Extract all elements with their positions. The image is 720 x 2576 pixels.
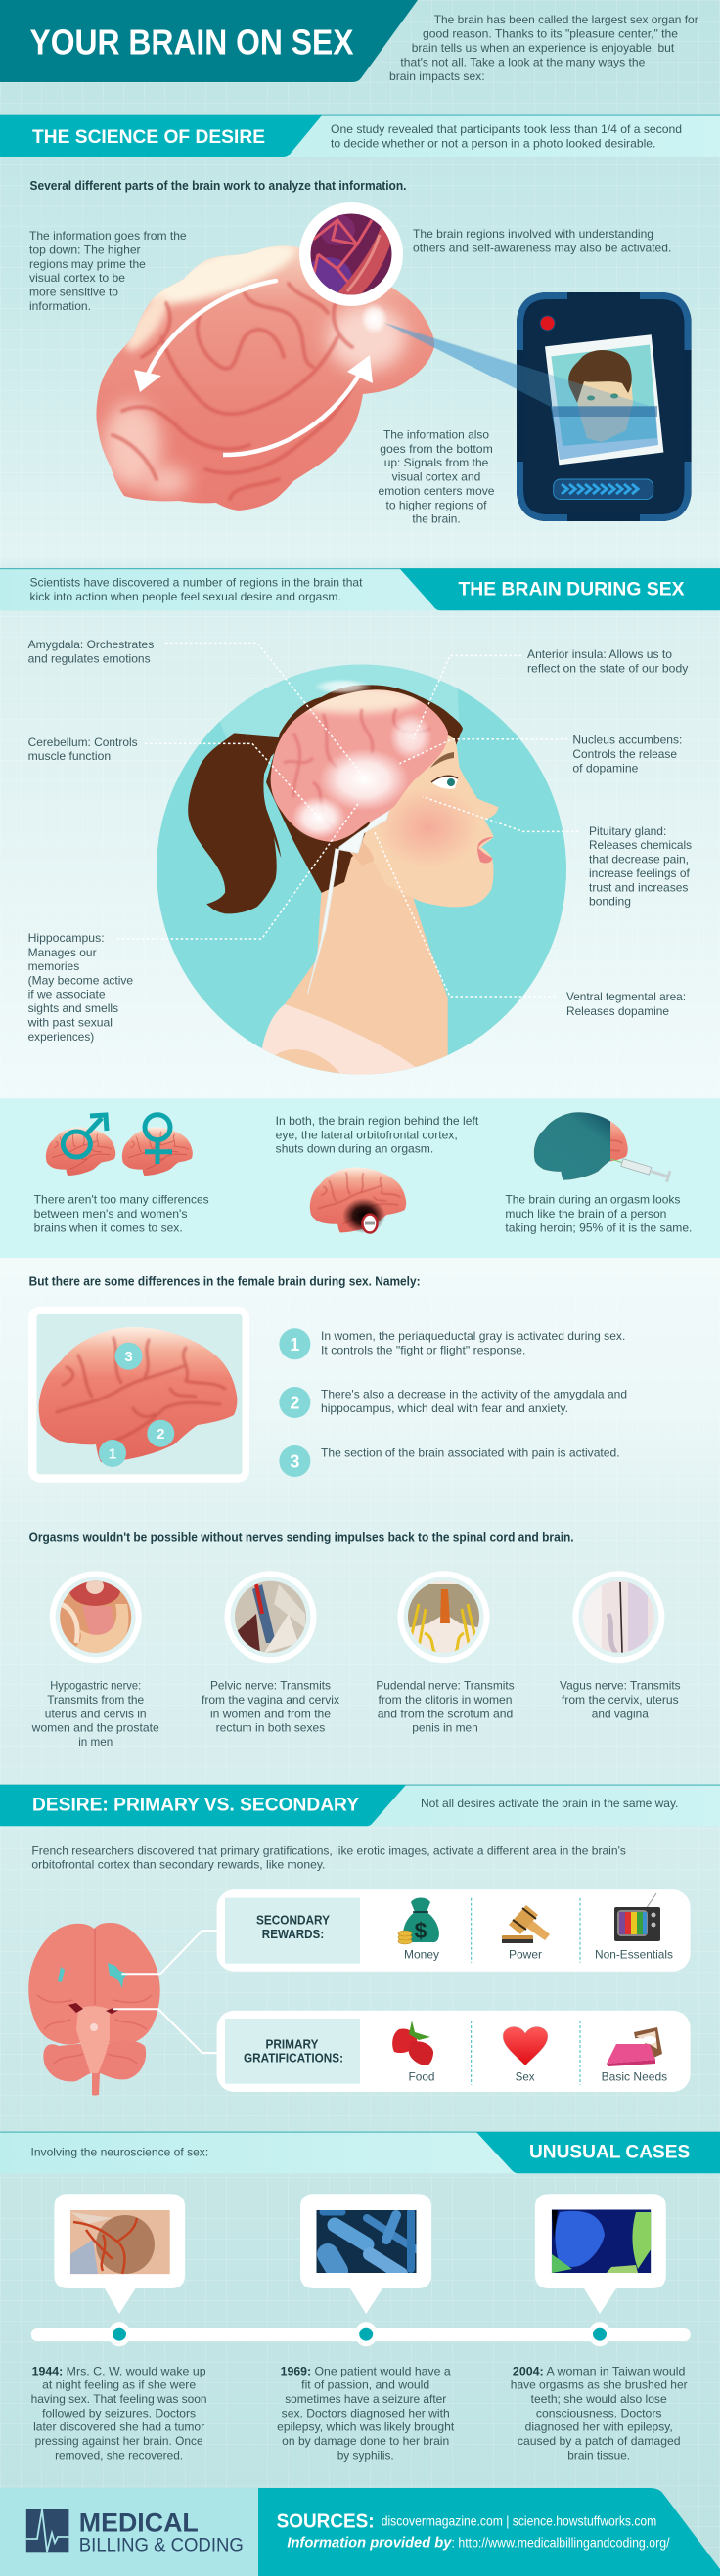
big brain illustration — [96, 231, 434, 511]
caption: vagus: Vagus nerve: Transmits — [560, 1679, 681, 1693]
label: hippocampus: sights and smells — [28, 1001, 118, 1015]
case bubble 1969 — [300, 2194, 431, 2314]
case text 2004: diagnosed her with epilepsy, — [525, 2421, 673, 2434]
label: hippocampus: memories — [28, 959, 79, 973]
text: self awareness: The brain regions involved with understanding — [413, 227, 653, 241]
panel: men vs women band — [0, 1098, 720, 1258]
intro text: brain impacts sex: — [389, 69, 485, 83]
panel: primary gratifications: PRIMARY — [266, 2036, 319, 2051]
phone scanner — [386, 292, 692, 521]
text: heroin comparison: taking heroin; 95% of it is the same. — [505, 1221, 692, 1234]
caption: hypogastric: uterus and cervis in — [45, 1707, 147, 1720]
nerve 3: pudendal — [397, 1571, 489, 1663]
marker 1 — [99, 1440, 126, 1467]
case text 1969: by syphilis. — [338, 2448, 394, 2462]
eye and brow — [430, 752, 458, 789]
footer: sources: Information provided by — [287, 2534, 452, 2551]
case text 1944: pressing against her brain. Once — [35, 2434, 203, 2448]
active regions: dark red — [68, 2003, 83, 2013]
marker 3 — [115, 1343, 143, 1370]
progress bar — [554, 479, 653, 499]
caption: pudendal: penis in men — [412, 1721, 478, 1735]
panel: primary gratifications — [217, 2011, 691, 2092]
section header: the brain during sex: THE BRAIN DURING SEX — [458, 580, 685, 600]
list item 1 — [279, 1328, 625, 1359]
label: nucleus accumbens: Nucleus accumbens: — [572, 733, 682, 747]
case text 2004: consciousness. Doctors — [536, 2406, 661, 2420]
list item 1: In women, the periaqueductal gray is activated during sex. — [321, 1329, 625, 1343]
panel: secondary rewards — [217, 1889, 691, 1972]
label: anterior insula — [527, 647, 688, 675]
case text 1944: removed, she recovered. — [55, 2448, 183, 2462]
caption: pudendal: from the clitoris in women — [378, 1693, 513, 1707]
case text 2004: brain tissue. — [567, 2448, 630, 2462]
icon: television — [614, 1893, 660, 1941]
case text 1969: sometimes have a seizure after — [285, 2392, 446, 2406]
text: top down: visual cortex to be — [29, 271, 125, 285]
label: pituitary gland — [589, 824, 692, 909]
icon: male and female brains — [46, 1115, 193, 1176]
label: pituitary gland: bonding — [589, 895, 631, 909]
text: french researchers — [31, 1843, 626, 1872]
icon: bed — [607, 2027, 662, 2066]
label: pituitary gland: increase feelings of — [589, 866, 690, 880]
caption: hypogastric: Hypogastric nerve: — [50, 1679, 141, 1693]
case text 1969: fit of passion, and would — [301, 2378, 429, 2392]
list item 2: There's also a decrease in the activity of the amygdala and — [321, 1388, 627, 1401]
arrow: top down — [147, 281, 276, 377]
label: pituitary gland: Releases chemicals — [589, 838, 692, 852]
icon: money bag: $ — [415, 1918, 428, 1943]
caption: pudendal: Pudendal nerve: Transmits — [376, 1679, 515, 1693]
caption: pelvic: Pelvic nerve: Transmits — [210, 1679, 331, 1693]
label: cerebellum — [28, 735, 138, 763]
text: heroin comparison: much like the brain of a person — [505, 1207, 666, 1221]
section header: the science of desire: THE SCIENCE OF DESIRE — [32, 127, 265, 148]
caption: vagus: and vagina — [592, 1707, 649, 1720]
text: top down: information. — [29, 299, 91, 313]
marker 1: 1 — [109, 1445, 116, 1462]
lips — [477, 837, 494, 863]
subheading: nerves: Orgasms wouldn't be possible without nerves sending impulses back to the spinal cord and brain. — [29, 1532, 574, 1545]
footer: logo: BILLING & CODING — [79, 2534, 244, 2555]
footer: sources — [258, 2488, 720, 2576]
text: few differences: brains when it comes to sex. — [34, 1221, 183, 1234]
intro text: The brain has been called the largest sex organ for — [434, 13, 698, 26]
text: orbitofrontal cortex: eye, the lateral orbitofrontal cortex, — [276, 1128, 458, 1141]
case text 1944: 1944: Mrs. C. W. would wake up — [32, 2364, 206, 2377]
text: self awareness: others and self-awareness may also be activated. — [413, 241, 671, 254]
logo mark — [26, 2509, 68, 2552]
text: french researchers: orbitofrontal cortex than secondary rewards, like money. — [31, 1858, 325, 1872]
text: top down: top down: The higher — [29, 243, 141, 256]
text: top down: regions may prime the — [29, 257, 146, 271]
magnified neurons inset — [299, 202, 403, 306]
label: pituitary gland: Pituitary gland: — [589, 824, 666, 838]
icon: heart — [503, 2026, 548, 2065]
case text 1969: 1969: One patient would have a — [281, 2364, 451, 2377]
label: anterior insula: Anterior insula: Allows us to — [527, 647, 672, 661]
case text 2004: teeth; she would also lose — [531, 2392, 667, 2406]
scan beam — [383, 323, 655, 421]
record light — [540, 316, 555, 331]
text: bottom up — [378, 427, 495, 526]
caption: pelvic: rectum in both sexes — [216, 1721, 325, 1735]
list item 2: hippocampus, which deal with fear and anxiety. — [321, 1401, 568, 1415]
text: heroin comparison: The brain during an orgasm looks — [505, 1193, 680, 1207]
text: bottom up: visual cortex and — [392, 470, 480, 484]
text: bottom up: up: Signals from the — [384, 456, 489, 469]
label: cerebellum: muscle function — [28, 749, 111, 763]
intro text: brain tells us when an experience is enjoyable, but — [412, 41, 675, 55]
label: amygdala: Amygdala: Orchestrates — [28, 638, 154, 651]
label: hippocampus: if we associate — [28, 988, 106, 1001]
label: amygdala: and regulates emotions — [28, 651, 151, 665]
dotted pointer lines — [117, 644, 578, 997]
label: hippocampus: Manages our — [28, 946, 97, 959]
brain activation glow — [319, 748, 409, 811]
footer: sources: discovermagazine.com | science.howstuffworks.com — [382, 2513, 656, 2529]
nerve 1: hypogastric — [50, 1571, 142, 1663]
marker 2 — [147, 1420, 174, 1447]
logo wordmark: MEDICAL — [79, 2508, 199, 2537]
case text 1944: later discovered she had a tumor — [33, 2421, 204, 2434]
section header: unusual cases — [0, 2132, 720, 2173]
panel: secondary rewards: SECONDARY — [256, 1913, 330, 1928]
panel: primary gratifications: Food — [409, 2069, 434, 2083]
caption: pudendal: and from the scrotum and — [378, 1707, 513, 1720]
text: bottom up: goes from the bottom — [380, 442, 493, 456]
panel: primary gratifications: GRATIFICATIONS: — [244, 2051, 343, 2065]
nerve 4: vagus — [572, 1571, 664, 1663]
intro text: good reason. Thanks to its "pleasure center," the — [423, 27, 678, 41]
text: top down: The information goes from the — [29, 229, 187, 243]
back hair — [266, 685, 463, 893]
node 2004 — [589, 2322, 610, 2346]
text: bottom up: The information also — [383, 427, 489, 441]
text: self awareness — [413, 227, 671, 254]
text: few differences: There aren't too many differences — [34, 1193, 209, 1207]
case text 2004: caused by a patch of damaged — [518, 2434, 681, 2448]
light beam over circle — [220, 665, 460, 760]
text: few differences: between men's and women's — [34, 1207, 188, 1221]
section header: the brain during sex: Scientists have discovered a number of regions in the brain that — [29, 576, 363, 590]
label: ventral tegmental area: Releases dopamine — [566, 1004, 669, 1018]
footer: sources: SOURCES: — [277, 2510, 375, 2532]
case text 2004 — [511, 2364, 688, 2462]
panel: secondary rewards: REWARDS: — [262, 1927, 324, 1941]
text: top down: more sensitive to — [29, 286, 118, 299]
face — [362, 735, 499, 908]
label: anterior insula: reflect on the state of our body — [527, 661, 688, 675]
list item 1: It controls the "fight or flight" response. — [321, 1343, 525, 1356]
subheading: several parts: Several different parts of the brain work to analyze that information. — [29, 179, 407, 193]
label: ventral tegmental area: Ventral tegmental area: — [566, 990, 686, 1003]
text: bottom up: the brain. — [412, 512, 461, 526]
caption: pelvic: from the vagina and cervix — [202, 1693, 339, 1707]
brain bottom view — [28, 1923, 160, 2095]
text: bottom up: emotion centers move — [378, 484, 495, 498]
nerve 2: pelvic — [225, 1571, 317, 1663]
case text 1969: on by damage done to her brain — [282, 2434, 449, 2448]
teal circle and head illustration — [157, 665, 566, 1074]
section header: the brain during sex — [0, 568, 720, 610]
caption: pelvic — [202, 1679, 339, 1735]
text: french researchers: French researchers discovered that primary gratifications, like erotic images, activate a different area in the brain's — [31, 1843, 626, 1857]
caption: pudendal — [376, 1679, 515, 1735]
cheek blush — [388, 794, 470, 861]
case text 1944: followed by seizures. Doctors — [42, 2406, 196, 2420]
label: hippocampus: (May become active — [28, 973, 133, 987]
text: orbitofrontal cortex: In both, the brain region behind the left — [276, 1114, 479, 1128]
section header: unusual cases: UNUSUAL CASES — [529, 2143, 690, 2163]
caption: vagus — [560, 1679, 681, 1720]
footer: logo — [0, 2488, 259, 2576]
case bubble 2004 — [535, 2194, 666, 2314]
caption: hypogastric: in men — [78, 1735, 112, 1749]
section header: the brain during sex: kick into action when people feel sexual desire and orgasm. — [29, 590, 341, 603]
node 1969 — [355, 2322, 378, 2346]
label: hippocampus — [27, 931, 133, 1044]
section header: desire primary vs secondary: Not all desires activate the brain in the same way. — [421, 1797, 678, 1810]
section header: desire primary vs secondary: DESIRE: PRIMARY VS. SECONDARY — [32, 1796, 359, 1816]
title: YOUR BRAIN ON SEX — [29, 22, 354, 63]
section header: unusual cases: Involving the neuroscience of sex: — [31, 2146, 208, 2159]
text: orbitofrontal cortex — [276, 1114, 479, 1156]
neck and shoulder skin — [262, 856, 448, 1074]
text: few differences — [34, 1193, 209, 1234]
list item 2: 2 — [290, 1394, 299, 1413]
text: heroin comparison — [505, 1193, 692, 1234]
text: orbitofrontal cortex: shuts down during an orgasm. — [276, 1142, 433, 1156]
brain signal spot — [361, 303, 388, 334]
label: hippocampus: experiences) — [28, 1030, 94, 1044]
spinal cord — [307, 802, 391, 994]
label: cerebellum: Cerebellum: Controls — [28, 735, 138, 749]
node 1944 — [108, 2322, 131, 2346]
list item 3: The section of the brain associated with pain is activated. — [321, 1445, 620, 1459]
panel: secondary rewards: Money — [404, 1948, 439, 1962]
case text 2004: have orgasms as she brushed her — [511, 2378, 688, 2392]
text: bottom up: to higher regions of — [385, 499, 487, 512]
intro text: that's not all. Take a look at the many ways the — [400, 55, 646, 68]
caption: hypogastric: Transmits from the — [47, 1693, 145, 1707]
label: nucleus accumbens: of dopamine — [572, 761, 639, 775]
icon: gavel — [502, 1905, 550, 1943]
active regions: teal — [108, 1963, 128, 1988]
text: top down — [29, 229, 187, 313]
case bubble 1944 — [54, 2194, 185, 2314]
label: ventral tegmental area — [566, 990, 686, 1018]
section header: desire primary vs secondary — [0, 1784, 720, 1826]
title banner — [0, 0, 418, 82]
case text 1969: epilepsy, which was likely brought — [277, 2421, 455, 2434]
case text 2004: 2004: A woman in Taiwan would — [513, 2364, 685, 2377]
label: nucleus accumbens: Controls the release — [572, 747, 677, 761]
shoulder strap — [262, 1004, 415, 1074]
footer: sources: : http://www.medicalbillingandcoding.org/ — [452, 2535, 670, 2550]
marker 2: 2 — [157, 1426, 164, 1443]
marker 3: 3 — [124, 1349, 133, 1365]
icon: strawberries — [392, 2021, 433, 2065]
label: pituitary gland: that decrease pain, — [589, 853, 689, 866]
list item 3 — [279, 1445, 620, 1477]
case text 1944: at night feeling as if she were — [42, 2378, 196, 2392]
panel: female brain diagram — [28, 1307, 249, 1483]
brain on head — [271, 679, 448, 842]
section header: the science of desire: One study revealed that participants took less than 1/4 of a second — [331, 122, 682, 136]
caption: vagus: from the cervix, uterus — [562, 1693, 679, 1707]
panel: secondary rewards: Non-Essentials — [595, 1948, 673, 1962]
connector lines — [112, 1931, 217, 2053]
photo — [386, 323, 663, 465]
case text 1969 — [277, 2364, 455, 2462]
ponytail — [188, 733, 289, 913]
icon: heroin brain and syringe — [534, 1112, 671, 1182]
panel: primary gratifications: Basic Needs — [602, 2069, 667, 2083]
subheading: female brain differences: But there are some differences in the female brain during sex. Namely: — [29, 1274, 421, 1288]
label: amygdala — [28, 638, 154, 665]
case text 1969: sex. Doctors diagnosed her with — [282, 2406, 450, 2420]
timeline — [31, 2322, 691, 2346]
label: nucleus accumbens — [572, 733, 682, 775]
list item 3: 3 — [290, 1452, 299, 1472]
caption: hypogastric — [31, 1679, 159, 1749]
panel: secondary rewards: Power — [509, 1948, 542, 1962]
icon: brain with shut down region — [310, 1167, 406, 1233]
icon: money bag — [398, 1897, 439, 1944]
case text 1944: having sex. That feeling was soon — [31, 2392, 207, 2406]
panel: primary gratifications: Sex — [516, 2069, 535, 2083]
label: pituitary gland: trust and increases — [589, 880, 688, 894]
arrow: bottom up — [223, 370, 362, 455]
section header: the science of desire — [0, 115, 720, 157]
caption: pelvic: in women and from the — [210, 1707, 331, 1720]
ear — [350, 841, 374, 866]
list item 1: 1 — [290, 1335, 299, 1355]
label: hippocampus: Hippocampus: — [28, 931, 105, 945]
label: hippocampus: with past sexual — [27, 1016, 112, 1030]
section header: the science of desire: to decide whether or not a person in a photo looked desirable. — [331, 137, 655, 151]
caption: hypogastric: women and the prostate — [31, 1721, 159, 1735]
case text 1944 — [31, 2364, 207, 2462]
list item 2 — [279, 1387, 627, 1418]
intro text — [389, 13, 698, 83]
